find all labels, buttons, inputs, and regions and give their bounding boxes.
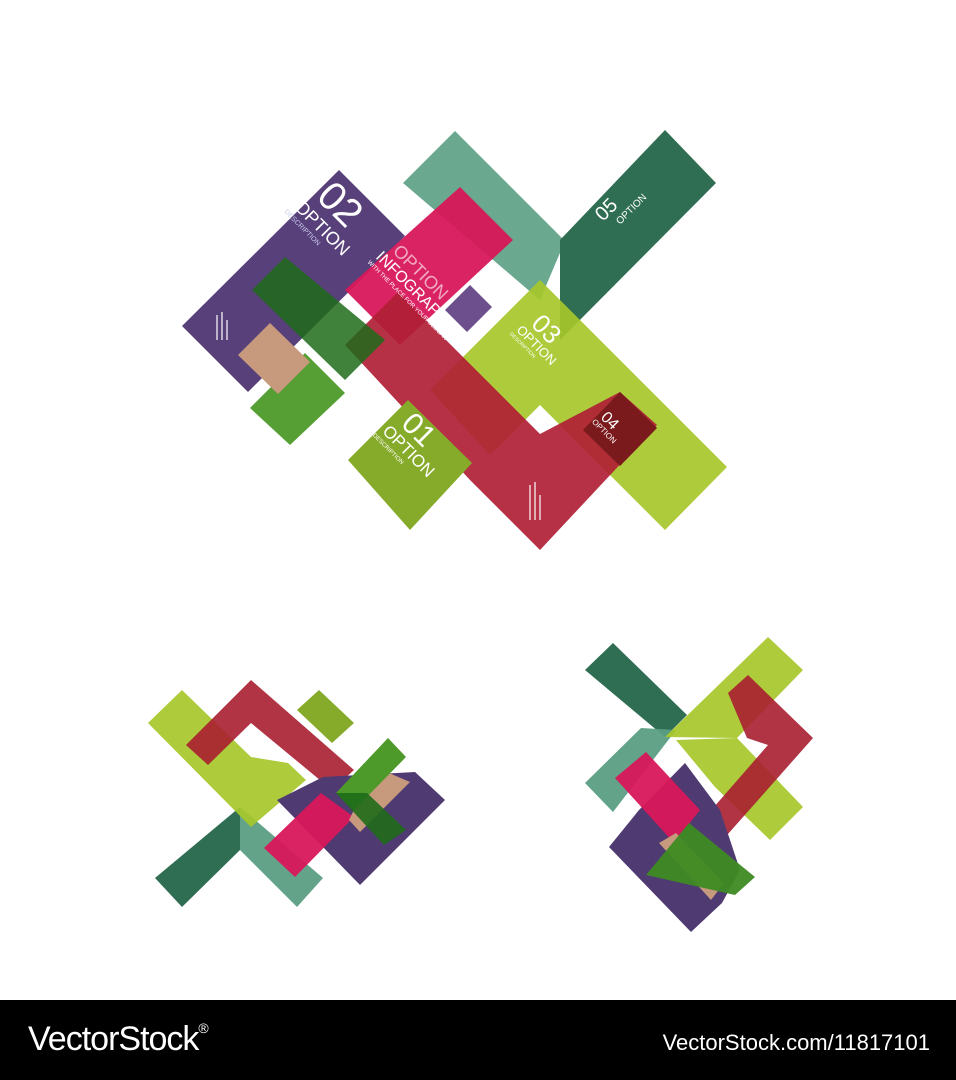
- text 01: [371, 398, 459, 486]
- pink band: [345, 187, 513, 345]
- text 02: [282, 165, 383, 265]
- green box 01: [348, 400, 472, 530]
- footer url: VectorStock.com/11817101: [663, 1030, 930, 1055]
- green lower-left: [250, 353, 345, 445]
- text infographic: INFOGRAPHIC: [372, 248, 463, 339]
- text 01: 01: [395, 407, 442, 454]
- text 02: OPTION: [291, 197, 354, 260]
- text infographic: WITH THE PLACE FOR YOUR SLOGAN: [366, 260, 448, 342]
- tan square: [238, 323, 310, 394]
- lime chevron 03: [430, 280, 727, 530]
- text 02: 02: [309, 173, 371, 236]
- text 01: OPTION: [379, 421, 438, 481]
- small composition right: [585, 637, 813, 932]
- main composition: [182, 130, 727, 550]
- text 05: 05: [591, 194, 622, 226]
- small composition left: [148, 680, 445, 907]
- dark red box 04: [583, 392, 657, 466]
- text 05: [591, 176, 649, 234]
- text infographic: [366, 234, 476, 344]
- text 03: OPTION: [514, 322, 560, 368]
- dark green overlay: [252, 257, 385, 380]
- footer brand: VectorStock®: [28, 1020, 208, 1058]
- text 04: OPTION: [590, 417, 618, 445]
- bar icons: [217, 312, 540, 520]
- text 01: DESCRIPTION: [371, 433, 404, 466]
- text 04: 04: [597, 409, 622, 433]
- footer bar: [0, 1000, 956, 1080]
- red chevron: [345, 292, 657, 550]
- teal band: [403, 131, 565, 300]
- dark green band 05: [560, 130, 716, 340]
- text infographic: OPTION: [389, 241, 452, 304]
- text 02: DESCRIPTION: [282, 209, 321, 247]
- text 04: [590, 407, 629, 445]
- purple band 02: [182, 170, 405, 392]
- purple bit: [445, 285, 492, 332]
- text 03: 03: [526, 308, 567, 350]
- text 03: [508, 302, 578, 372]
- text 03: DESCRIPTION: [508, 331, 537, 360]
- text 05: OPTION: [614, 192, 649, 227]
